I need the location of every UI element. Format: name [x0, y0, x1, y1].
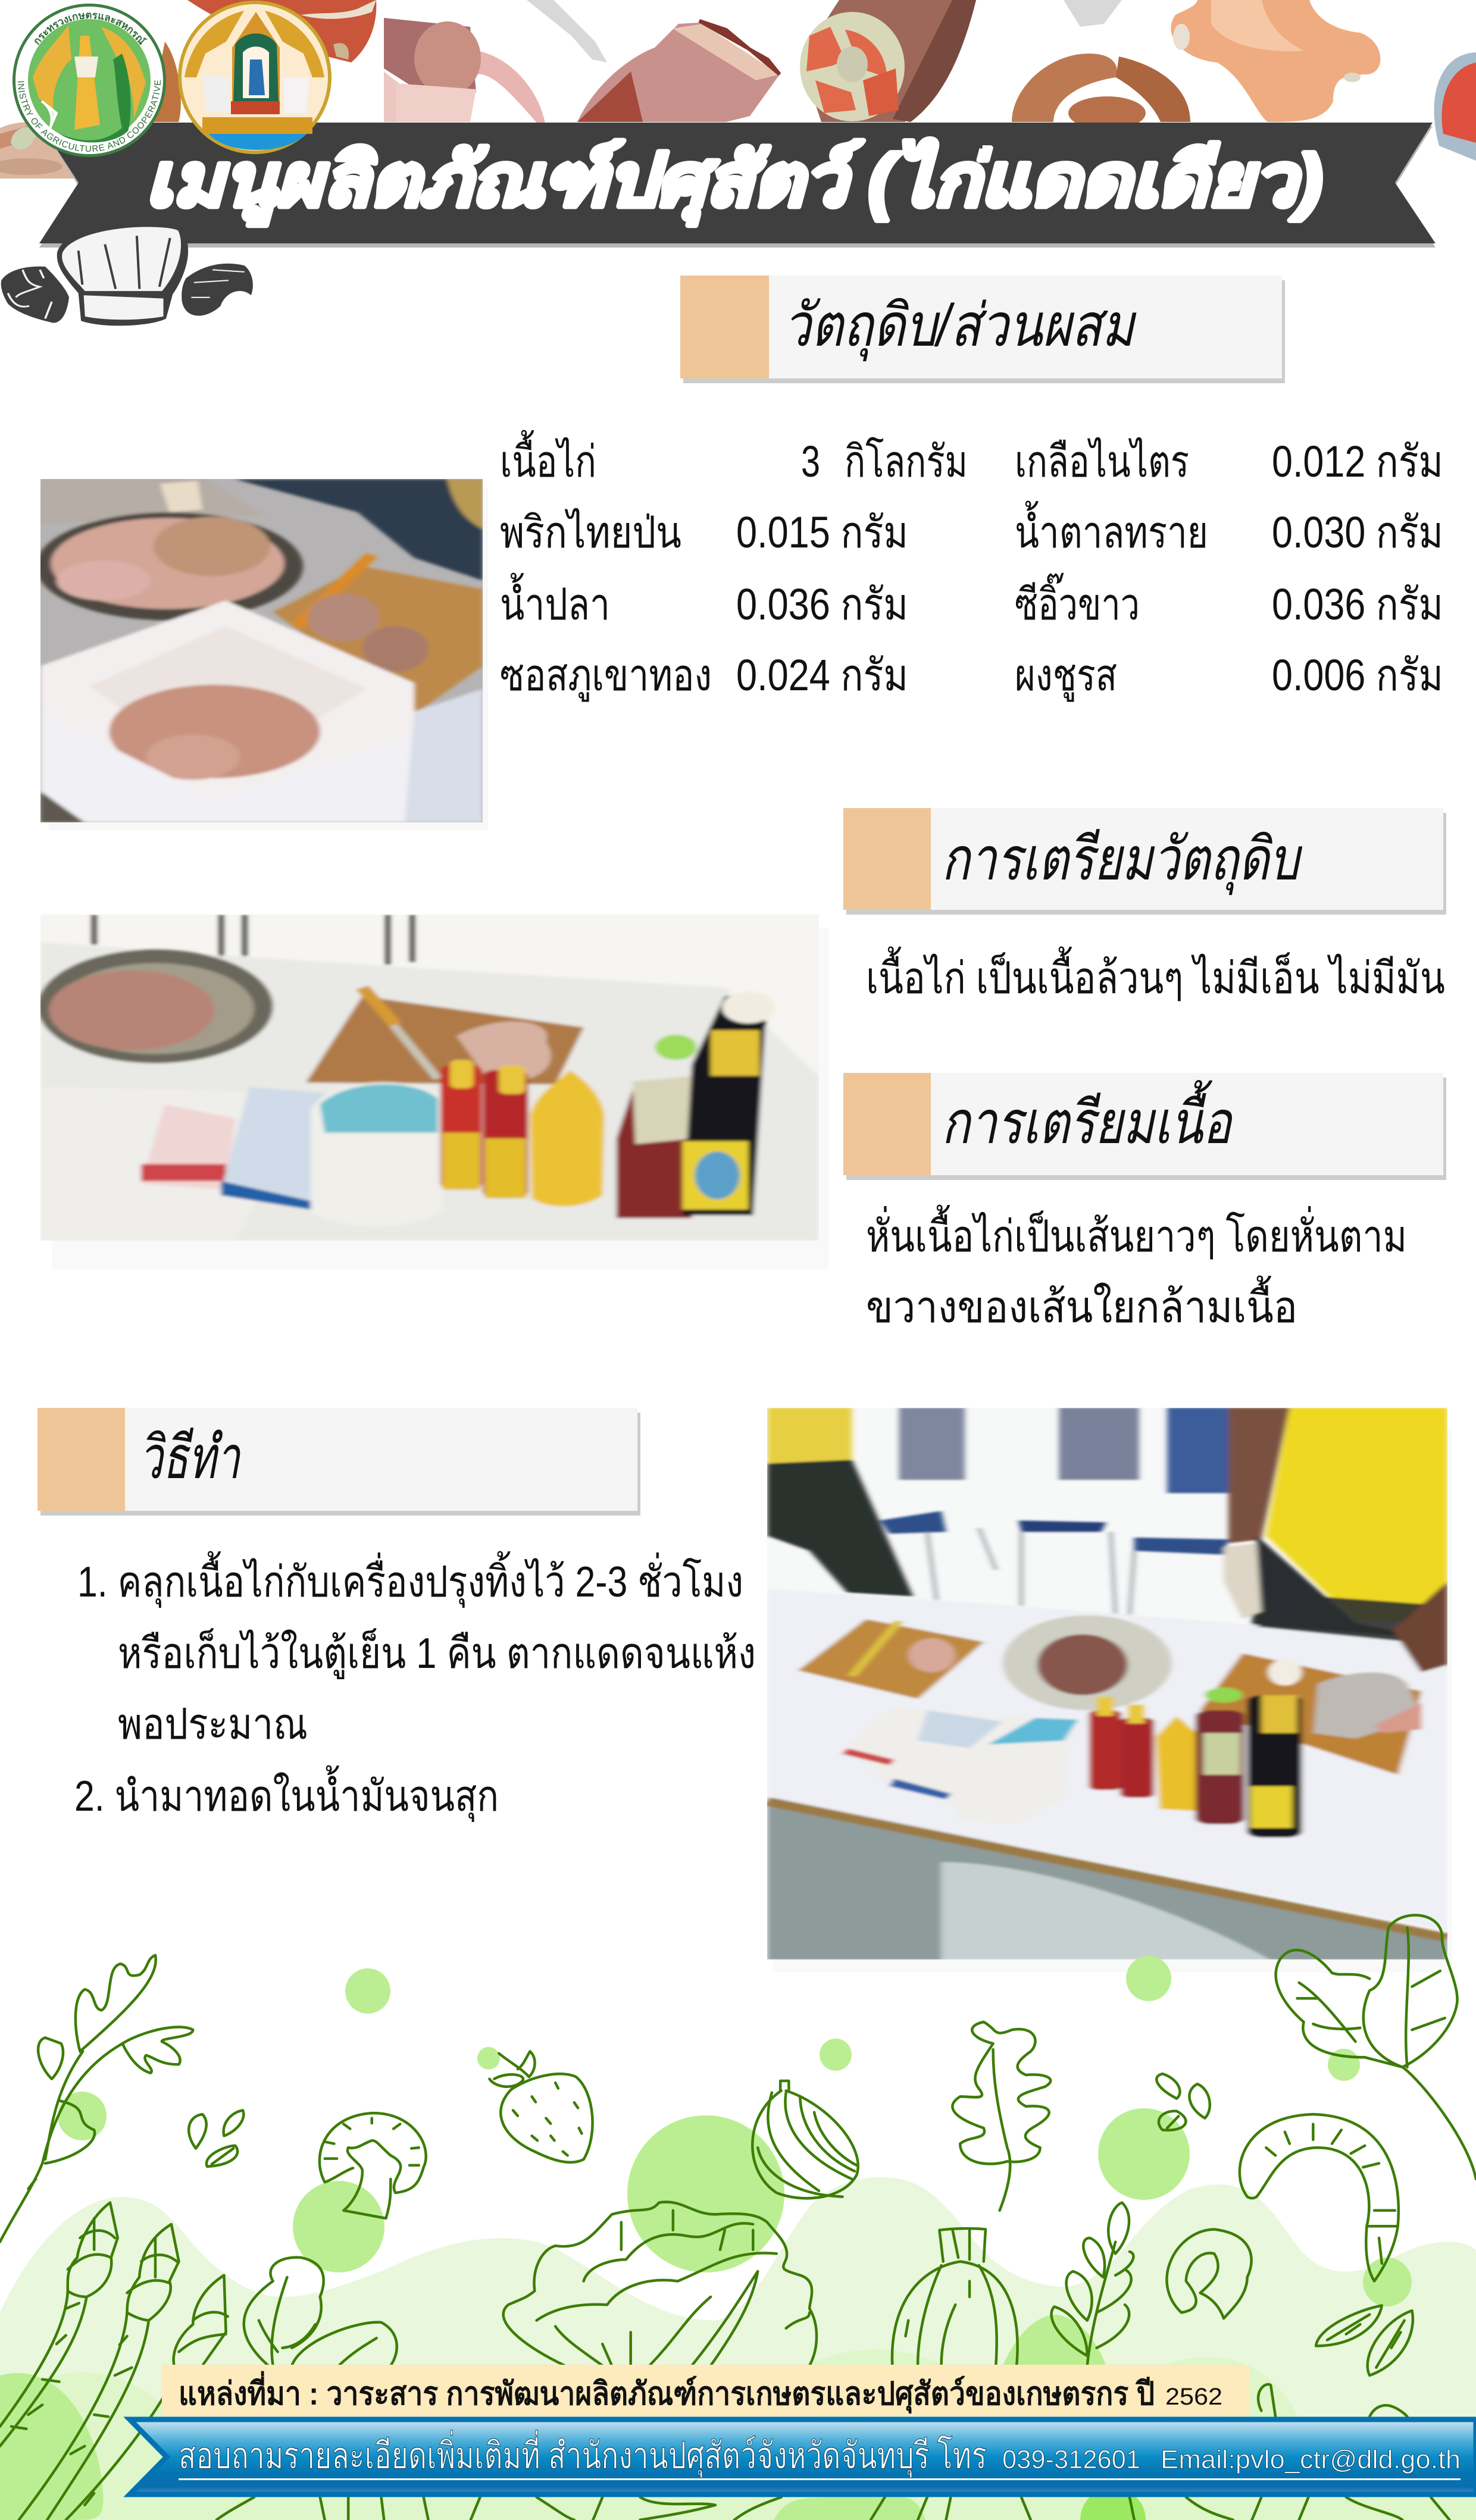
- ingredients list: 3: [801, 437, 820, 486]
- line art: small shroom: [1167, 2229, 1252, 2318]
- line art: seed leaves: [1156, 2074, 1210, 2130]
- ingredients list: ผงชูรส: [1015, 650, 1117, 702]
- method steps: พอประมาณ: [118, 1701, 308, 1748]
- source credit: แหล่งที่มา : วาระสาร การพัฒนาผลิตภัณฑ์การเกษตรและปศุสัตว์ของเกษตรกร ปี: [179, 2371, 1155, 2414]
- line art: under ribbon: [217, 2384, 1450, 2520]
- method steps: หรือเก็บไว้ในตู้เย็น 1 คืน ตากแดดจนแห้ง: [118, 1628, 756, 1679]
- meat: ham joint: [800, 0, 976, 122]
- ingredients list: 0.030 กรัม: [1272, 508, 1443, 557]
- contact ribbon: สอบถามรายละเอียดเพิ่มเติมที่ สำนักงานปศุสัตว์จังหวัดจันทบุรี โทร: [179, 2430, 987, 2478]
- photo: chicken in tub: [36, 479, 488, 830]
- ingredients list: เกลือไนไตร: [1015, 437, 1189, 486]
- background: green dots: [0, 1956, 1412, 2520]
- meat: left plate: [0, 42, 181, 183]
- ingredients list: พริกไทยป่น: [500, 508, 681, 557]
- line art: mushroom: [320, 2113, 426, 2218]
- ingredients list: ซอสภูเขาทอง: [500, 650, 712, 702]
- meat: cut slab: [577, 21, 780, 122]
- title banner: [39, 123, 1436, 248]
- meat: chicken leg: [1171, 0, 1380, 122]
- meat: top steak: [187, 0, 376, 62]
- ingredients list: 0.024 กรัม: [736, 650, 908, 700]
- section header: raw material preparation: การเตรียมวัตถุดิบ: [942, 826, 1303, 896]
- section header: raw material preparation: [843, 808, 1446, 915]
- meat: sausage slices: [384, 18, 546, 134]
- photo: ingredients on table: [37, 915, 828, 1269]
- section header: method: [37, 1408, 640, 1516]
- section header: ingredients: วัตถุดิบ/ส่วนผสม: [783, 292, 1137, 362]
- line art: spinach bottom left: [244, 2258, 397, 2366]
- section header: ingredients: [680, 276, 1285, 383]
- line art: strawberry: [489, 2052, 593, 2162]
- line art: lettuce: [504, 2202, 817, 2366]
- photo: preparing on table: [767, 1408, 1452, 1973]
- ingredients list: 0.015 กรัม: [736, 508, 908, 557]
- contact ribbon: Email:pvlo_ctr@dld.go.th: [1161, 2445, 1461, 2474]
- method steps: [74, 1551, 756, 1822]
- meat: sausage: [1012, 54, 1190, 130]
- line art: small leaves: [189, 2110, 243, 2167]
- seal: ministry of agriculture: กระทรวงเกษตรและสหกรณ์: [35, 12, 148, 45]
- seal: department of livestock: [178, 1, 332, 154]
- utensil shadows: [527, 0, 1122, 62]
- icon: left steak: [1, 267, 69, 323]
- method steps: 2. นำมาทอดในน้ำมันจนสุก: [74, 1765, 499, 1822]
- section header: meat preparation: [843, 1073, 1446, 1180]
- background: green hills: [0, 2177, 1476, 2520]
- ingredients list: 0.006 กรัม: [1272, 650, 1443, 700]
- ingredients list: น้ำปลา: [500, 572, 610, 629]
- ingredients list: [500, 430, 1443, 702]
- line art: top-left herb: [0, 1955, 193, 2242]
- contact ribbon: 039-312601: [1002, 2445, 1140, 2474]
- line art: shrimp: [1240, 2114, 1399, 2281]
- line art: oak leaf: [952, 2022, 1050, 2211]
- line art: asparagus: [0, 2203, 228, 2520]
- source credit: [162, 2365, 1250, 2416]
- source credit: 2562: [1165, 2384, 1222, 2410]
- line art: rosemary: [1052, 2203, 1133, 2366]
- line art: onion: [752, 2081, 858, 2198]
- section header: method: วิธีทำ: [139, 1425, 241, 1491]
- title: เมนูผลิตภัณฑ์ปศุสัตว์ (ไก่แดดเดียว): [146, 139, 1322, 226]
- ingredients list: 0.012 กรัม: [1272, 437, 1443, 486]
- contact ribbon: [130, 2419, 1476, 2494]
- text: meat preparation: [866, 1204, 1407, 1332]
- icon: right steak: [182, 264, 253, 316]
- ingredients list: กิโลกรัม: [845, 437, 968, 486]
- line art: vegetables: [0, 1915, 1476, 2520]
- text: meat preparation: ขวางของเส้นใยกล้ามเนื้อ: [866, 1275, 1297, 1332]
- ingredients list: น้ำตาลทราย: [1015, 500, 1208, 557]
- method steps: 1. คลุกเนื้อไก่กับเครื่องปรุงทิ้งไว้ 2-3 ชั่วโมง: [77, 1551, 743, 1608]
- meat: right edge steak: [1434, 52, 1476, 161]
- top meat illustrations: [0, 0, 1476, 183]
- section header: meat preparation: การเตรียมเนื้อ: [942, 1080, 1233, 1156]
- ingredients list: เนื้อไก่: [500, 430, 596, 486]
- ingredients list: ซีอิ๊วขาว: [1015, 572, 1140, 629]
- line art: pair of leaves: [1316, 2306, 1413, 2375]
- line art: cucumber: [892, 2228, 1018, 2366]
- ingredients list: 0.036 กรัม: [736, 580, 908, 629]
- line art: spinach top right: [1276, 1915, 1476, 2179]
- icon: chef hat with steaks: [1, 218, 253, 325]
- ingredients list: 0.036 กรัม: [1272, 580, 1443, 629]
- icon: chef hat: [57, 218, 188, 325]
